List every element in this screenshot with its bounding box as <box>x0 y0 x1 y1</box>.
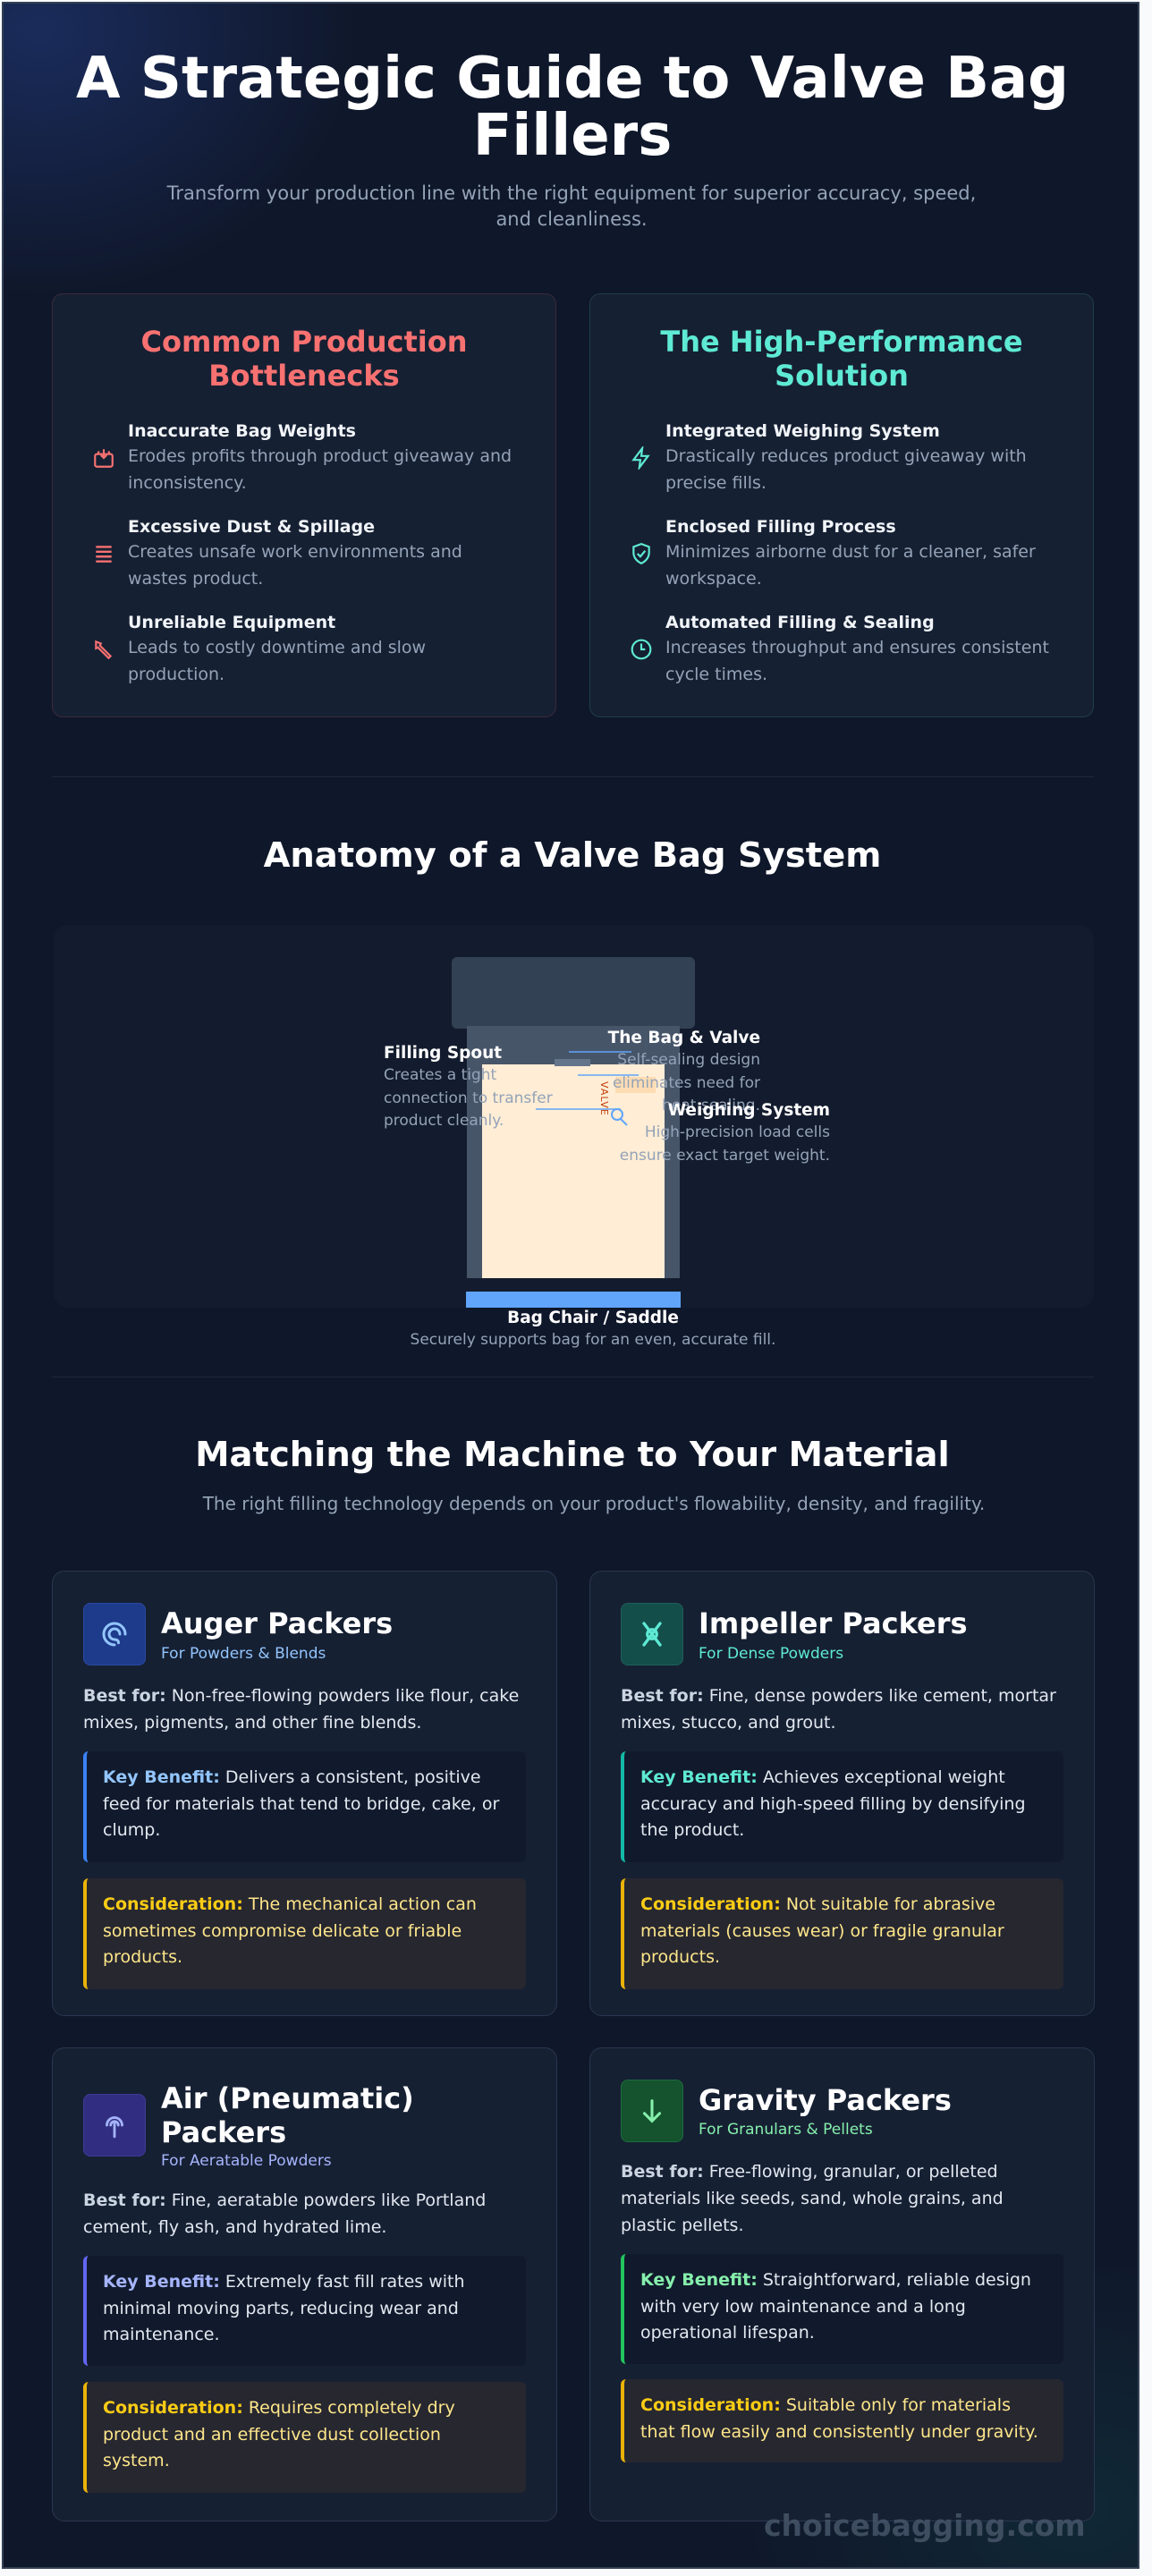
label: bag chair: Bag Chair / Saddle <box>507 1309 679 1327</box>
card: auger: For Powders & Blends <box>161 1645 326 1663</box>
panel: solution <box>589 293 1094 717</box>
icon: impeller <box>621 1603 683 1665</box>
panel: diagram <box>54 925 1094 1308</box>
heading: solution: The High-Performance <box>660 325 1023 359</box>
card: impeller: Best for: Fine, dense powders like cement, mortar mixes, stucco, and grout. <box>621 1686 1056 1733</box>
label: weighing system <box>620 1101 830 1165</box>
item: equipment: Leads to costly downtime and slow production. <box>128 638 426 684</box>
consideration <box>83 2382 526 2493</box>
card: gravity <box>589 2047 1095 2521</box>
key benefit: Key Benefit: Delivers a consistent, positive feed for materials that tend to bridge, cake, or clump. <box>103 1767 499 1840</box>
card: impeller: For Dense Powders <box>699 1645 843 1663</box>
item: enclosed: Enclosed Filling Process <box>665 517 896 537</box>
key benefit <box>621 1751 1063 1862</box>
icon: scale <box>94 449 114 468</box>
consideration <box>621 2379 1063 2462</box>
heading: matching: Matching the Machine to Your Material <box>195 1435 950 1475</box>
panel: bottlenecks <box>52 293 556 717</box>
label: bag & valve: The Bag & Valve <box>608 1029 760 1047</box>
label: bag & valve: Self-sealing design eliminates need for heat sealing. <box>613 1051 760 1114</box>
machine diagram: VALVE <box>598 1081 610 1116</box>
key benefit: Key Benefit: Extremely fast fill rates with minimal moving parts, reducing wear and maintenance. <box>103 2272 465 2344</box>
key benefit: Key Benefit: Straightforward, reliable design with very low maintenance and a long operational lifespan. <box>640 2270 1031 2343</box>
item: inaccurate weights <box>94 421 512 493</box>
label: weighing system: Weighing System <box>668 1101 830 1120</box>
item: dust: Creates unsafe work environments and wastes product. <box>128 542 462 589</box>
item: dust <box>96 517 462 589</box>
heading: bottlenecks: Bottlenecks <box>208 359 400 393</box>
heading: solution <box>660 325 1023 393</box>
consideration: Consideration: Suitable only for materials that flow easily and consistently under gravity. <box>640 2395 1038 2442</box>
icon: layers <box>96 546 112 563</box>
label: filling spout: Filling Spout <box>384 1044 502 1063</box>
heading: solution: Solution <box>775 359 909 393</box>
subtitle: Transform your production line with the right equipment for superior accuracy, speed, and cleanliness. <box>167 182 976 230</box>
heading: bottlenecks <box>141 325 467 393</box>
title: A Strategic Guide to Valve Bag <box>76 46 1069 112</box>
title: Fillers <box>473 103 672 169</box>
item: automated: Automated Filling & Sealing <box>665 613 935 632</box>
card: auger <box>52 1571 557 2016</box>
item: weighing <box>631 421 1027 493</box>
item: dust: Excessive Dust & Spillage <box>128 517 375 537</box>
heading: anatomy: Anatomy of a Valve Bag System <box>264 835 881 876</box>
consideration <box>621 1878 1063 1989</box>
title <box>76 46 1069 169</box>
card: air: Air (Pneumatic) Packers <box>161 2081 414 2149</box>
card: air: Best for: Fine, aeratable powders like Portland cement, fly ash, and hydrated lime. <box>83 2190 486 2237</box>
item: automated <box>631 613 1049 684</box>
card: auger: Auger Packers <box>161 1606 393 1640</box>
label: filling spout: Creates a tight connection to transfer product cleanly. <box>384 1066 553 1130</box>
card: impeller <box>589 1571 1095 2016</box>
label: bag chair: Securely supports bag for an even, accurate fill. <box>411 1331 775 1349</box>
watermark: choicebagging.com <box>764 2508 1086 2543</box>
item: inaccurate weights: Erodes profits through product giveaway and inconsistency. <box>128 446 512 493</box>
key benefit <box>83 2256 526 2366</box>
bag chair bar <box>466 1292 681 1308</box>
item: inaccurate weights: Inaccurate Bag Weights <box>128 421 356 441</box>
label: weighing system: High-precision load cells ensure exact target weight. <box>620 1123 830 1165</box>
consideration: Consideration: The mechanical action can sometimes compromise delicate or friable products. <box>103 1894 477 1967</box>
icon: auger <box>83 1603 146 1665</box>
icon: gravity <box>621 2080 683 2142</box>
label: bag chair <box>411 1309 775 1349</box>
subtitle: matching: The right filling technology depends on your product's flowability, density, and fragility. <box>203 1493 985 1514</box>
card: gravity: Gravity Packers <box>699 2083 952 2117</box>
item: weighing: Drastically reduces product giveaway with precise fills. <box>665 446 1027 493</box>
card: auger: Best for: Non-free-flowing powders like flour, cake mixes, pigments, and other fine blends. <box>83 1686 519 1733</box>
key benefit <box>83 1751 526 1862</box>
machine diagram <box>452 957 695 1278</box>
heading: bottlenecks: Common Production <box>141 325 467 359</box>
consideration: Consideration: Requires completely dry product and an effective dust collection system. <box>103 2398 455 2470</box>
item: equipment <box>95 613 426 684</box>
item: enclosed: Minimizes airborne dust for a cleaner, safer workspace. <box>665 542 1036 589</box>
consideration: Consideration: Not suitable for abrasive materials (causes wear) or fragile granular products. <box>640 1894 1004 1967</box>
icon: air <box>83 2094 146 2157</box>
card: gravity: For Granulars & Pellets <box>699 2121 873 2139</box>
item: automated: Increases throughput and ensures consistent cycle times. <box>665 638 1049 684</box>
card: impeller: Impeller Packers <box>699 1606 968 1640</box>
icon: shield <box>632 543 650 564</box>
item: equipment: Unreliable Equipment <box>128 613 335 632</box>
item: weighing: Integrated Weighing System <box>665 421 940 441</box>
icon: wrench <box>95 640 113 660</box>
consideration <box>83 1878 526 1989</box>
icon: bolt <box>631 446 650 470</box>
key benefit <box>621 2254 1063 2364</box>
key benefit: Key Benefit: Achieves exceptional weight accuracy and high-speed filling by densifying the product. <box>640 1767 1026 1840</box>
card: air <box>52 2047 557 2521</box>
card: gravity: Best for: Free-flowing, granular, or pelleted materials like seeds, sand, whole grains, and plastic pellets. <box>621 2162 1004 2235</box>
item: enclosed <box>632 517 1036 589</box>
icon: clock <box>631 639 651 660</box>
card: air: For Aeratable Powders <box>161 2152 332 2170</box>
